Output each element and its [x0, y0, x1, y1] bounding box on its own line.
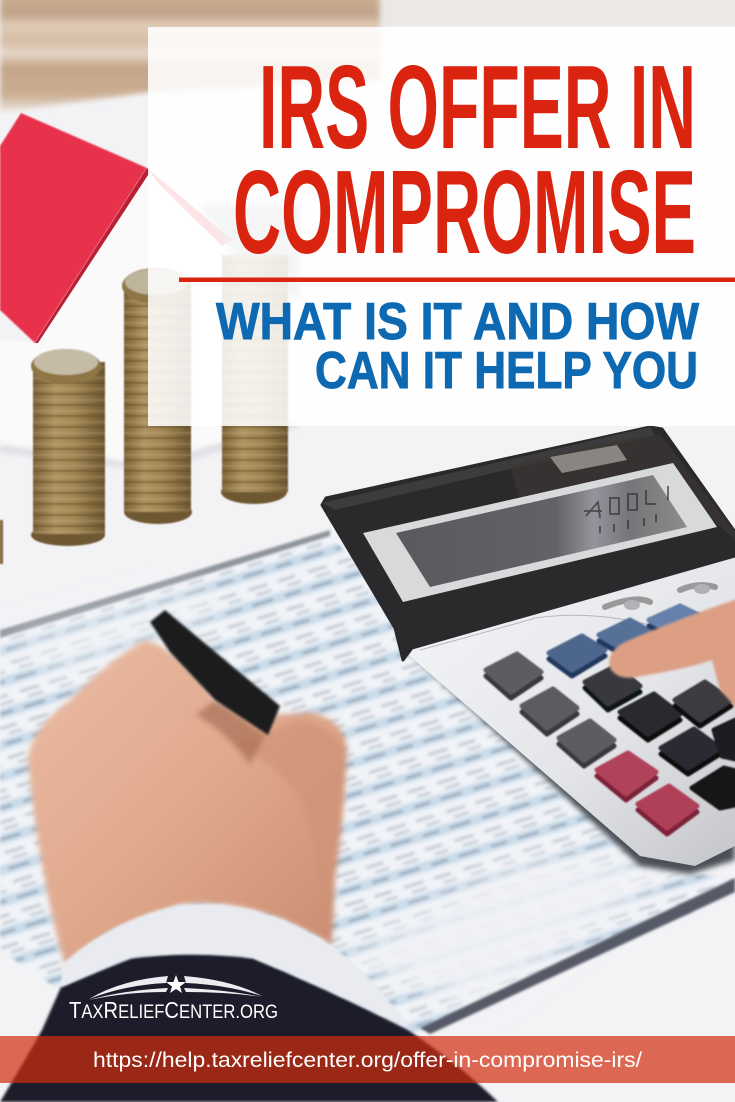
photo: suit sleeve and shirt cuff — [0, 904, 498, 1102]
photo: pen — [150, 610, 280, 735]
logo: TaxReliefCenter.org: TAXRELIEFCENTER.ORG — [69, 997, 278, 1023]
photo: writing hand with pen — [28, 640, 347, 965]
translucent title panel — [148, 27, 735, 426]
URL banner: https://help.taxreliefcenter.org/offer-in-compromise-irs/ — [93, 1049, 642, 1072]
photo: coin stacks — [0, 255, 288, 564]
URL banner — [0, 1036, 735, 1083]
photo: pressing finger — [609, 598, 735, 712]
photo: model house — [0, 113, 300, 472]
window blinds backdrop — [0, 0, 735, 112]
subtitle: what is it and how can it help you — [216, 293, 700, 400]
title: IRS OFFER IN COMPROMISE — [233, 41, 696, 279]
photo: spreadsheet paper — [0, 530, 735, 1034]
photo: calculator — [322, 427, 735, 874]
logo: TaxReliefCenter.org — [69, 975, 278, 1023]
divider rule — [179, 278, 735, 282]
